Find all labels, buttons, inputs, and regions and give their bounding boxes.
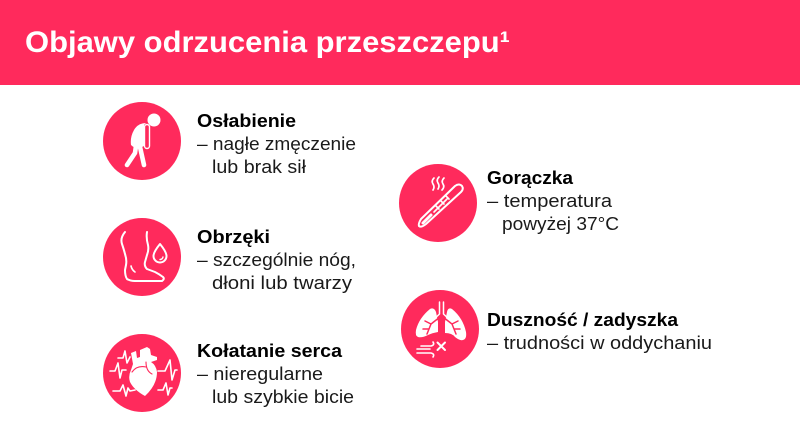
- heading: Gorączka: Gorączka: [487, 167, 574, 188]
- description: Kołatanie serca: lub szybkie bicie: [212, 386, 354, 407]
- symptom: swelling: [103, 218, 356, 296]
- description: Gorączka: – temperatura: [487, 190, 613, 211]
- symptom: palpitations: [103, 334, 354, 412]
- description: Duszność / zadyszka: – trudności w oddychaniu: [487, 332, 712, 353]
- heading: Obrzęki: Obrzęki: [197, 226, 270, 247]
- header banner: [0, 0, 800, 85]
- description: Gorączka: [487, 190, 619, 234]
- description: Osłabienie: – nagłe zmęczenie: [197, 133, 356, 154]
- icon: thermometer with heat: [399, 164, 477, 242]
- description: Kołatanie serca: [197, 363, 354, 407]
- description: Obrzęki: [197, 249, 356, 293]
- description: Osłabienie: lub brak sił: [212, 156, 306, 177]
- description: Obrzęki: dłoni lub twarzy: [212, 272, 353, 293]
- heading: Duszność / zadyszka: Duszność / zadyszka: [487, 309, 679, 330]
- symptom: fever: [399, 164, 619, 242]
- heading: Kołatanie serca: Kołatanie serca: [197, 340, 343, 361]
- symptom: shortness of breath: [401, 290, 712, 368]
- icon: swollen foot and drop: [103, 218, 181, 296]
- description: Gorączka: powyżej 37°C: [502, 213, 619, 234]
- icon: lungs with blocked air: [401, 290, 479, 368]
- symptom: weakness: [103, 102, 356, 180]
- heading: Osłabienie: Osłabienie: [197, 110, 296, 131]
- description: Obrzęki: – szczególnie nóg,: [197, 249, 356, 270]
- description: Kołatanie serca: – nieregularne: [197, 363, 323, 384]
- icon: weak stooped person: [103, 102, 181, 180]
- title: Objawy odrzucenia przeszczepu¹: [25, 26, 510, 59]
- icon: heart with pulse lines: [103, 334, 181, 412]
- description: Osłabienie: [197, 133, 356, 177]
